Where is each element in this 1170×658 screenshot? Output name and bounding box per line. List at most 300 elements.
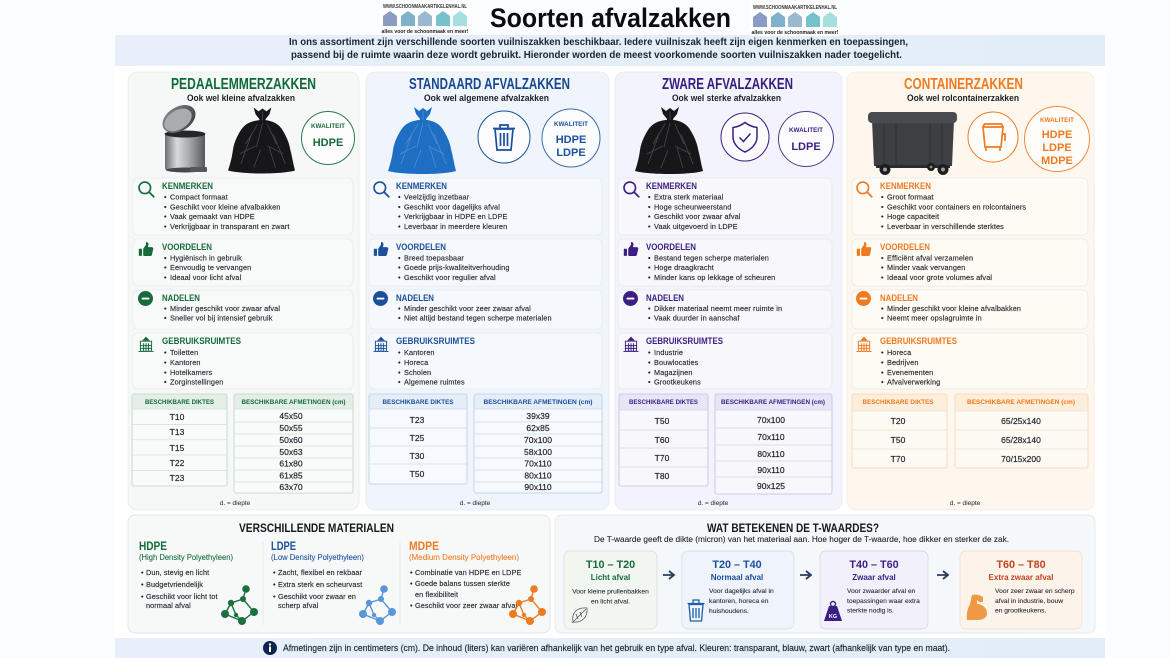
card: T60-T80: en grootkeukens.	[995, 608, 1046, 614]
card: T60-T80: afval in industrie, bouw	[995, 598, 1063, 605]
section: gebruiksruimtes: Scholen	[404, 368, 431, 377]
table: diktes: T30	[410, 451, 425, 461]
section: gebruiksruimtes: Zorginstellingen	[170, 378, 223, 386]
section: kenmerken: Leverbaar in verschillende sterktes	[887, 222, 1004, 231]
material: MDPE: •	[410, 601, 413, 610]
section: gebruiksruimtes: GEBRUIKSRUIMTES	[646, 336, 723, 346]
title: Soorten afvalzakken	[490, 3, 731, 33]
material: LDPE: (Low Density Polyethyleen)	[271, 553, 364, 562]
heading: STANDAARD AFVALZAKKEN	[409, 76, 570, 93]
section: kenmerken: Verkrijgbaar in HDPE en LDPE	[404, 212, 508, 221]
card: T10-T20: T10 – T20	[586, 559, 635, 571]
table: afmetingen: 70x100	[757, 415, 785, 425]
note: d. = diepte	[220, 500, 251, 507]
table: diktes	[852, 394, 947, 468]
quality badge: MDPE	[1041, 155, 1073, 167]
section: voordelen: VOORDELEN	[646, 242, 696, 252]
icon: leaf	[572, 608, 587, 623]
icon: bin circle	[478, 111, 530, 163]
section: kenmerken	[852, 178, 1088, 235]
section: gebruiksruimtes: •	[881, 348, 884, 357]
material: LDPE: LDPE	[271, 539, 296, 553]
section: voordelen: •	[164, 273, 167, 282]
card: T20-T40: Voor dagelijks afval in	[709, 588, 774, 595]
section: gebruiksruimtes: GEBRUIKSRUIMTES	[162, 336, 241, 346]
main white area	[115, 66, 1105, 638]
section: voordelen: •	[164, 263, 167, 272]
section: kenmerken: KENMERKEN	[396, 181, 447, 191]
table: diktes: T50	[655, 416, 670, 426]
section: gebruiksruimtes: •	[881, 358, 884, 367]
footer band	[115, 638, 1105, 658]
icon: kg weight: KG	[829, 614, 837, 620]
logo right	[750, 2, 840, 36]
section: kenmerken: KENMERKEN	[880, 181, 931, 191]
panel: zware afvalzakken	[615, 72, 842, 510]
section: gebruiksruimtes: Kantoren	[170, 358, 201, 367]
section: voordelen: •	[648, 254, 651, 262]
section: kenmerken: Geschikt voor kleine afvalbakken	[170, 202, 281, 211]
table: afmetingen	[474, 394, 602, 493]
section: gebruiksruimtes: •	[648, 368, 651, 377]
table: afmetingen: BESCHIKBARE AFMETINGEN (cm)	[242, 399, 346, 406]
quality badge	[778, 112, 834, 166]
section: kenmerken: •	[398, 212, 401, 221]
section: nadelen: Dikker materiaal neemt meer ruimte in	[654, 304, 782, 313]
heading: ZWARE AFVALZAKKEN	[662, 76, 793, 93]
table: diktes: T10	[170, 412, 185, 422]
material: MDPE: Combinatie van HDPE en LDPE	[415, 568, 521, 577]
card: T40-T60	[820, 551, 928, 629]
section: gebruiksruimtes: •	[398, 378, 401, 386]
material: HDPE: HDPE	[139, 539, 167, 553]
section: kenmerken: KENMERKEN	[162, 181, 213, 191]
section: gebruiksruimtes: Grootkeukens	[654, 378, 701, 386]
quality badge	[542, 109, 600, 167]
arrow	[800, 571, 811, 579]
card: T20-T40: T20 – T40	[712, 559, 762, 571]
quality badge: LDPE	[556, 147, 586, 159]
table: afmetingen: 62x85	[526, 423, 550, 433]
section: nadelen: Minder geschikt voor zeer zwaar afval	[404, 304, 531, 313]
section: nadelen: Minder geschikt voor kleine afvalbakken	[887, 304, 1021, 313]
heading: WAT BETEKENEN DE T-WAARDES?	[707, 523, 879, 535]
table: afmetingen: 65/25x140	[1001, 416, 1041, 426]
section: voordelen: •	[648, 263, 651, 272]
material: LDPE: scherp afval	[278, 601, 319, 610]
table: afmetingen: 61x85	[279, 470, 303, 480]
section: voordelen: Eenvoudig te vervangen	[170, 263, 251, 272]
table: diktes: T25	[410, 433, 425, 443]
section: kenmerken: •	[648, 192, 651, 202]
section: kenmerken: •	[881, 202, 884, 211]
card: T40-T60: sterkte nodig is.	[847, 608, 894, 614]
section: kenmerken: Veelzijdig inzetbaar	[404, 192, 470, 202]
section: nadelen: Niet altijd bestand tegen scherpe materialen	[404, 314, 552, 323]
arrow	[663, 571, 674, 579]
section: gebruiksruimtes: •	[648, 348, 651, 357]
section: voordelen: VOORDELEN	[880, 242, 930, 252]
quality badge: KWALITEIT	[554, 122, 588, 128]
section: nadelen: Sneller vol bij intensief gebruik	[170, 314, 273, 323]
material: MDPE: •	[410, 568, 413, 577]
section: voordelen	[369, 239, 602, 286]
material: LDPE: Geschikt voor zwaar en	[278, 592, 356, 601]
table: diktes: T22	[170, 458, 185, 468]
table: afmetingen: 70x110	[757, 432, 785, 442]
table: afmetingen: 80x110	[757, 449, 785, 459]
section: voordelen: Ideaal voor licht afval	[170, 273, 242, 282]
section: gebruiksruimtes: •	[164, 348, 167, 357]
section: kenmerken: Hoge scheurweerstand	[654, 202, 731, 211]
material: LDPE	[271, 539, 396, 625]
material: HDPE: Geschikt voor licht tot	[146, 592, 218, 601]
section: gebruiksruimtes	[852, 333, 1088, 389]
section: voordelen: VOORDELEN	[396, 242, 446, 252]
table: afmetingen: BESCHIKBARE AFMETINGEN (cm)	[967, 399, 1075, 406]
section: gebruiksruimtes: Algemene ruimtes	[404, 378, 465, 386]
card: T40-T60: toepassingen waar extra	[847, 598, 920, 605]
section: kenmerken: •	[164, 212, 167, 221]
section: gebruiksruimtes: •	[398, 368, 401, 377]
table: diktes: T50	[410, 469, 425, 479]
logo left	[380, 1, 470, 35]
material: MDPE: (Medium Density Polyethyleen)	[409, 553, 519, 562]
table: afmetingen	[715, 394, 832, 494]
section: nadelen: •	[398, 314, 401, 323]
section: voordelen: Efficiënt afval verzamelen	[887, 254, 973, 262]
intro text: In ons assortiment zijn verschillende soorten vuilniszakken beschikbaar. Iedere vuilniszak heeft zijn eigen kenmerken en toepassingen,	[289, 37, 908, 48]
section: voordelen	[852, 239, 1088, 286]
heading: PEDAALEMMERZAKKEN	[171, 76, 316, 93]
card: T10-T20: en licht afval.	[591, 598, 630, 606]
material: MDPE: Geschikt voor zeer zwaar afval	[415, 601, 517, 610]
subtitle: Ook wel kleine afvalzakken	[187, 93, 295, 103]
card: T40-T60: Voor zwaarder afval en	[847, 588, 916, 595]
table: afmetingen: 90x110	[757, 465, 785, 475]
subtitle: Ook wel sterke afvalzakken	[672, 93, 781, 103]
section: kenmerken: •	[881, 192, 884, 202]
heading: VERSCHILLENDE MATERIALEN	[239, 523, 394, 535]
intro band	[115, 35, 1105, 66]
card: T20-T40	[682, 551, 794, 629]
section: voordelen: Minder vaak vervangen	[887, 263, 965, 272]
section: nadelen: •	[164, 304, 167, 313]
section: kenmerken: •	[164, 202, 167, 211]
material: LDPE: Zacht, flexibel en rekbaar	[278, 568, 362, 577]
table: afmetingen: 65/28x140	[1001, 435, 1041, 445]
footer note	[263, 641, 950, 655]
table: diktes: T70	[891, 454, 906, 464]
quality badge: KWALITEIT	[789, 128, 823, 134]
material: LDPE: •	[273, 568, 276, 577]
section: voordelen: Ideaal voor grote volumes afval	[887, 273, 992, 282]
section: kenmerken: Geschikt voor containers en rolcontainers	[887, 202, 1026, 211]
table: afmetingen: 80x110	[524, 470, 552, 480]
section: kenmerken: Leverbaar in meerdere kleuren	[404, 222, 507, 231]
section: nadelen: NADELEN	[162, 293, 200, 303]
card: T40-T60: Zwaar afval	[852, 573, 896, 582]
section: nadelen: NADELEN	[396, 293, 434, 303]
section: kenmerken: •	[164, 192, 167, 202]
table: afmetingen: 45x50	[279, 411, 303, 421]
quality badge: KWALITEIT	[1040, 118, 1074, 124]
table: afmetingen: BESCHIKBARE AFMETINGEN (cm)	[484, 399, 592, 406]
table: afmetingen	[234, 394, 353, 493]
section: voordelen	[618, 239, 832, 286]
section: nadelen: Minder geschikt voor zwaar afval	[170, 304, 280, 313]
icon: container	[868, 112, 957, 175]
section: voordelen	[133, 239, 353, 286]
icon: shield circle	[721, 113, 769, 161]
section: nadelen: •	[164, 314, 167, 323]
table: afmetingen: 61x80	[279, 458, 303, 468]
table: afmetingen: 39x39	[526, 411, 550, 421]
section: kenmerken: Vaak gemaakt van HDPE	[170, 212, 255, 221]
section: kenmerken: •	[648, 222, 651, 231]
arrow	[937, 571, 948, 579]
table: afmetingen: 63x70	[279, 482, 303, 492]
panel: standaard afvalzakken	[366, 72, 609, 510]
footer note: Afmetingen zijn in centimeters (cm). De inhoud (liters) kan variëren afhankelijk van het gebruik en type afval. Kleuren: transparant, blauw, zwart (afhankelijk van type en maat).	[283, 643, 950, 653]
section: nadelen: •	[398, 304, 401, 313]
section: gebruiksruimtes: Kantoren	[404, 348, 435, 357]
section: nadelen: •	[648, 314, 651, 323]
section: gebruiksruimtes: Afvalverwerking	[887, 378, 940, 386]
section: gebruiksruimtes: Horeca	[887, 348, 912, 357]
section: kenmerken: Verkrijgbaar in transparant en zwart	[170, 222, 290, 231]
subtitle: De T-waarde geeft de dikte (micron) van het materiaal aan. Hoe hoger de T-waarde, hoe dikker en sterker de zak.	[594, 535, 1009, 544]
section: kenmerken: •	[648, 202, 651, 211]
card: T60-T80: Voor zeer zwaar en scherp	[995, 588, 1075, 595]
material: HDPE: •	[141, 568, 144, 577]
quality badge: HDPE	[556, 134, 586, 146]
section: gebruiksruimtes: Industrie	[654, 348, 683, 357]
material: MDPE: MDPE	[409, 539, 439, 553]
section: gebruiksruimtes: •	[398, 358, 401, 367]
table: diktes: T70	[655, 453, 670, 463]
material: MDPE: •	[410, 579, 413, 588]
table: diktes: T60	[655, 435, 670, 445]
quality badge	[1024, 106, 1090, 172]
material: MDPE: en flexibiliteit	[415, 590, 458, 599]
card: T60-T80: Extra zwaar afval	[989, 573, 1053, 582]
section: kenmerken: •	[164, 222, 167, 231]
section: gebruiksruimtes: Magazijnen	[654, 368, 693, 377]
section: voordelen: Breed toepasbaar	[404, 254, 464, 262]
section: voordelen: •	[881, 254, 884, 262]
panel: pedaalemmerzakken	[128, 72, 359, 510]
section: gebruiksruimtes: Hotelkamers	[170, 368, 213, 377]
table: diktes	[132, 394, 227, 486]
section: voordelen: Hygiënisch in gebruik	[170, 254, 242, 262]
section: kenmerken: Compact formaat	[170, 192, 228, 202]
card: T40-T60: T40 – T60	[849, 559, 899, 571]
section: nadelen: •	[881, 314, 884, 323]
section: kenmerken: Groot formaat	[887, 192, 934, 202]
table: diktes: BESCHIKBARE DIKTES	[629, 399, 699, 406]
section: kenmerken: Hoge capaciteit	[887, 212, 939, 221]
section: voordelen: VOORDELEN	[162, 242, 212, 252]
section: nadelen	[133, 290, 353, 329]
heading: CONTAINERZAKKEN	[904, 76, 1023, 93]
subtitle: Ook wel rolcontainerzakken	[907, 93, 1019, 103]
table: diktes: T13	[170, 427, 185, 437]
table: afmetingen: 50x60	[279, 435, 303, 445]
section: voordelen: Geschikt voor regulier afval	[404, 273, 496, 282]
quality badge: HDPE	[1042, 129, 1072, 141]
table: diktes: T80	[655, 471, 670, 481]
table: diktes: T23	[410, 415, 425, 425]
section: gebruiksruimtes: •	[881, 378, 884, 386]
section: gebruiksruimtes	[618, 333, 832, 389]
section: gebruiksruimtes: Bouwlocaties	[654, 358, 699, 367]
material: HDPE: (High Density Polyethyleen)	[139, 553, 233, 562]
material: HDPE: •	[141, 580, 144, 589]
icon: info	[263, 641, 277, 655]
card: T20-T40: kantoren, horeca en	[709, 598, 769, 605]
section: kenmerken	[133, 178, 353, 235]
section: voordelen: Hoge draagkracht	[654, 263, 714, 272]
section: kenmerken: KENMERKEN	[646, 181, 697, 191]
section: gebruiksruimtes: GEBRUIKSRUIMTES	[880, 336, 957, 346]
section: nadelen: NADELEN	[880, 293, 918, 303]
material: HDPE: normaal afval	[146, 601, 191, 610]
section: kenmerken	[618, 178, 832, 235]
quality badge: HDPE	[313, 137, 343, 149]
section: nadelen	[852, 290, 1088, 329]
section: voordelen: •	[881, 263, 884, 272]
table: afmetingen	[955, 394, 1088, 468]
section: voordelen: Minder kans op lekkage of scheuren	[654, 273, 775, 282]
card: T20-T40: huishoudens.	[709, 608, 749, 615]
intro text	[289, 37, 908, 61]
section: nadelen: •	[881, 304, 884, 313]
material: LDPE: •	[273, 580, 276, 589]
section: nadelen: NADELEN	[646, 293, 684, 303]
section: gebruiksruimtes: Horeca	[404, 358, 429, 367]
table: diktes: T20	[891, 416, 906, 426]
quality badge: KWALITEIT	[311, 124, 345, 130]
table: afmetingen: BESCHIKBARE AFMETINGEN (cm)	[721, 399, 825, 406]
note: d. = diepte	[950, 500, 981, 507]
section: kenmerken: •	[398, 202, 401, 211]
section: nadelen: Vaak duurder in aanschaf	[654, 314, 740, 323]
section: voordelen: •	[398, 273, 401, 282]
section: gebruiksruimtes: •	[164, 358, 167, 367]
note: d. = diepte	[460, 500, 491, 507]
card: T60-T80: T60 – T80	[996, 559, 1046, 571]
icon: black bag	[228, 107, 295, 174]
table: diktes: T50	[891, 435, 906, 445]
material: HDPE: Dun, stevig en licht	[146, 568, 209, 577]
table: afmetingen: 70x110	[524, 458, 552, 468]
material: HDPE: Budgetvriendelijk	[146, 580, 203, 589]
section: nadelen: Neemt meer opslagruimte in	[887, 314, 982, 323]
section: kenmerken: •	[881, 212, 884, 221]
section: gebruiksruimtes: GEBRUIKSRUIMTES	[396, 336, 475, 346]
icon: muscle arm	[967, 595, 987, 620]
section: nadelen	[618, 290, 832, 329]
table: diktes: BESCHIKBARE DIKTES	[382, 399, 454, 406]
table: afmetingen: 50x55	[279, 423, 303, 433]
table: afmetingen: 50x63	[279, 447, 303, 457]
section: kenmerken: Vaak uitgevoerd in LDPE	[654, 222, 738, 231]
table: diktes	[369, 394, 467, 484]
section: gebruiksruimtes: Evenementen	[887, 368, 933, 377]
section: kenmerken: •	[648, 212, 651, 221]
card: T10-T20: Voor kleine prullenbakken	[572, 588, 649, 596]
section: gebruiksruimtes: •	[164, 378, 167, 386]
card: T10-T20: Licht afval	[591, 573, 630, 582]
material: MDPE: Goede balans tussen sterkte	[415, 579, 510, 588]
intro text: passend bij de ruimte waarin deze wordt gebruikt. Hieronder worden de meest voorkomende soorten vuilniszakken nader toegelicht.	[291, 50, 902, 61]
section: kenmerken: Extra sterk materiaal	[654, 192, 724, 202]
table: diktes	[619, 394, 708, 486]
panel: containerzakken	[847, 72, 1094, 510]
panel: T-waardes	[555, 515, 1095, 633]
card: T60-T80	[960, 551, 1082, 629]
icon: container circle	[968, 112, 1018, 162]
icon: black bag	[635, 107, 703, 174]
table: afmetingen: 58x100	[524, 447, 552, 457]
section: gebruiksruimtes: •	[164, 368, 167, 377]
section: gebruiksruimtes: Toiletten	[170, 348, 198, 357]
section: voordelen: Bestand tegen scherpe materialen	[654, 254, 769, 262]
note: d. = diepte	[698, 500, 729, 507]
section: voordelen: •	[164, 254, 167, 262]
icon: blue bag	[388, 107, 456, 174]
section: kenmerken: Geschikt voor zwaar afval	[654, 212, 741, 221]
section: gebruiksruimtes: •	[881, 368, 884, 377]
material: LDPE: Extra sterk en scheurvast	[278, 580, 362, 589]
material: HDPE	[139, 539, 258, 625]
table: diktes: BESCHIKBARE DIKTES	[862, 399, 934, 406]
section: kenmerken: •	[881, 222, 884, 231]
section: voordelen: •	[648, 273, 651, 282]
quality badge: LDPE	[791, 141, 821, 153]
card: T10-T20	[564, 551, 657, 629]
section: voordelen: •	[398, 254, 401, 262]
icon: pedal bin	[157, 99, 207, 172]
table: afmetingen: 90x125	[757, 481, 785, 491]
icon: bin	[688, 600, 704, 621]
table: afmetingen: 70/15x200	[1001, 454, 1041, 464]
section: gebruiksruimtes: Bedrijven	[887, 358, 919, 367]
table: diktes: T15	[170, 443, 185, 453]
table: afmetingen: 70x100	[524, 435, 552, 445]
section: gebruiksruimtes: •	[398, 348, 401, 357]
section: voordelen: •	[881, 273, 884, 282]
section: gebruiksruimtes: •	[648, 378, 651, 386]
section: kenmerken: •	[398, 222, 401, 231]
panel: verschillende materialen	[128, 515, 550, 633]
quality badge	[302, 112, 354, 164]
section: kenmerken: Geschikt voor dagelijks afval	[404, 202, 500, 211]
section: gebruiksruimtes	[369, 333, 602, 389]
table: diktes: BESCHIKBARE DIKTES	[145, 399, 215, 406]
table: diktes: T23	[170, 473, 185, 483]
section: nadelen	[369, 290, 602, 329]
section: kenmerken: •	[398, 192, 401, 202]
section: voordelen: Goede prijs-kwaliteitverhouding	[404, 263, 510, 272]
section: nadelen: •	[648, 304, 651, 313]
material: MDPE	[409, 539, 546, 625]
subtitle: Ook wel algemene afvalzakken	[424, 93, 549, 103]
section: gebruiksruimtes: •	[648, 358, 651, 367]
table: afmetingen: 90x110	[524, 482, 552, 492]
material: LDPE: •	[273, 592, 276, 601]
